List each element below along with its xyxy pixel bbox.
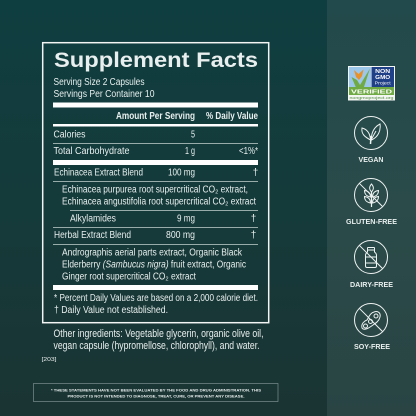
footnotes: † Daily Value not established. — [54, 305, 168, 316]
row: calories: Calories — [54, 130, 86, 140]
row: herbal extract blend — [53, 230, 258, 245]
other ingredients — [54, 328, 264, 352]
row: calories — [53, 130, 258, 144]
row: alkylamides: 9 mg — [177, 214, 195, 224]
badge: Non-GMO Project Verified: VERIFIED — [351, 89, 393, 95]
badge: Non-GMO Project Verified: NON — [375, 69, 390, 75]
other ingredients: vegan capsule (hypromellose, chlorophyll), and water. — [54, 340, 260, 352]
row: echinacea extract blend: 100 mg — [168, 168, 195, 178]
badge: Non-GMO Project Verified: nongmoproject.org — [350, 96, 394, 100]
serving info — [54, 77, 155, 100]
label: gluten-free: GLUTEN-FREE — [346, 217, 397, 226]
other ingredients: Other ingredients: Vegetable glycerin, organic olive oil, — [54, 328, 264, 340]
row: total carbohydrate: <1%* — [239, 146, 258, 157]
label: vegan: VEGAN — [358, 155, 384, 164]
badge: Non-GMO Project Verified: Project — [375, 80, 392, 86]
lot code: [203] — [42, 357, 57, 363]
row: herbal extract blend: Herbal Extract Blend — [54, 230, 131, 241]
row: alkylamides: † — [251, 214, 256, 224]
serving info: Servings Per Container 10 — [54, 89, 155, 100]
herbal ingredients: Ginger root supercritical CO₂ extract — [62, 272, 196, 282]
badge: soy-free — [354, 304, 390, 351]
serving info: Serving Size 2 Capsules — [54, 77, 144, 88]
label: dairy-free: DAIRY-FREE — [350, 280, 393, 289]
badge: gluten-free — [346, 178, 397, 226]
left background — [0, 0, 327, 416]
row: alkylamides — [53, 210, 258, 228]
FDA disclaimer box: PRODUCT IS NOT INTENDED TO DIAGNOSE, TREAT, CURE, OR PREVENT ANY DISEASE. — [68, 393, 244, 398]
footnotes: * Percent Daily Values are based on a 2,000 calorie diet. — [54, 293, 258, 304]
right badge column background — [327, 0, 416, 416]
row: total carbohydrate — [53, 146, 258, 165]
echinacea ingredients — [62, 185, 256, 208]
badge: Non-GMO Project Verified: GMO — [375, 75, 391, 81]
row: echinacea extract blend: † — [253, 168, 258, 178]
label: soy-free: SOY-FREE — [354, 342, 390, 351]
badge: vegan — [354, 116, 388, 164]
herbal ingredients: Elderberry (Sambucus nigra) fruit extract, Organic — [62, 260, 246, 270]
badge: Non-GMO Project Verified — [348, 66, 395, 100]
row: echinacea extract blend — [53, 168, 258, 182]
echinacea ingredients: Echinacea purpurea root supercritical CO₂ extract, — [62, 185, 248, 196]
row: herbal extract blend: † — [251, 230, 256, 241]
row: alkylamides: Alkylamides — [70, 214, 116, 224]
echinacea ingredients: Echinacea angustifolia root supercritical CO₂ extract — [62, 196, 256, 208]
footnotes — [53, 285, 258, 316]
FDA disclaimer box — [34, 384, 278, 402]
row: calories: 5 — [191, 130, 195, 140]
heading: Supplement Facts: Supplement Facts — [54, 48, 258, 72]
row: total carbohydrate: Total Carbohydrate — [54, 146, 130, 157]
FDA disclaimer box: * THESE STATEMENTS HAVE NOT BEEN EVALUATED BY THE FOOD AND DRUG ADMINISTRATION. THIS — [51, 388, 261, 393]
row: herbal extract blend: 800 mg — [166, 230, 195, 241]
badge: dairy-free — [350, 240, 393, 289]
table header: Amount Per Serving — [116, 111, 195, 122]
table header — [53, 102, 258, 126]
row: echinacea extract blend: Echinacea Extract Blend — [54, 168, 143, 178]
panel: supplement facts — [43, 43, 269, 323]
table header: % Daily Value — [206, 111, 258, 122]
row: total carbohydrate: 1 g — [185, 146, 195, 157]
herbal ingredients: Andrographis aerial parts extract, Organic Black — [62, 248, 243, 258]
herbal ingredients — [62, 248, 246, 282]
